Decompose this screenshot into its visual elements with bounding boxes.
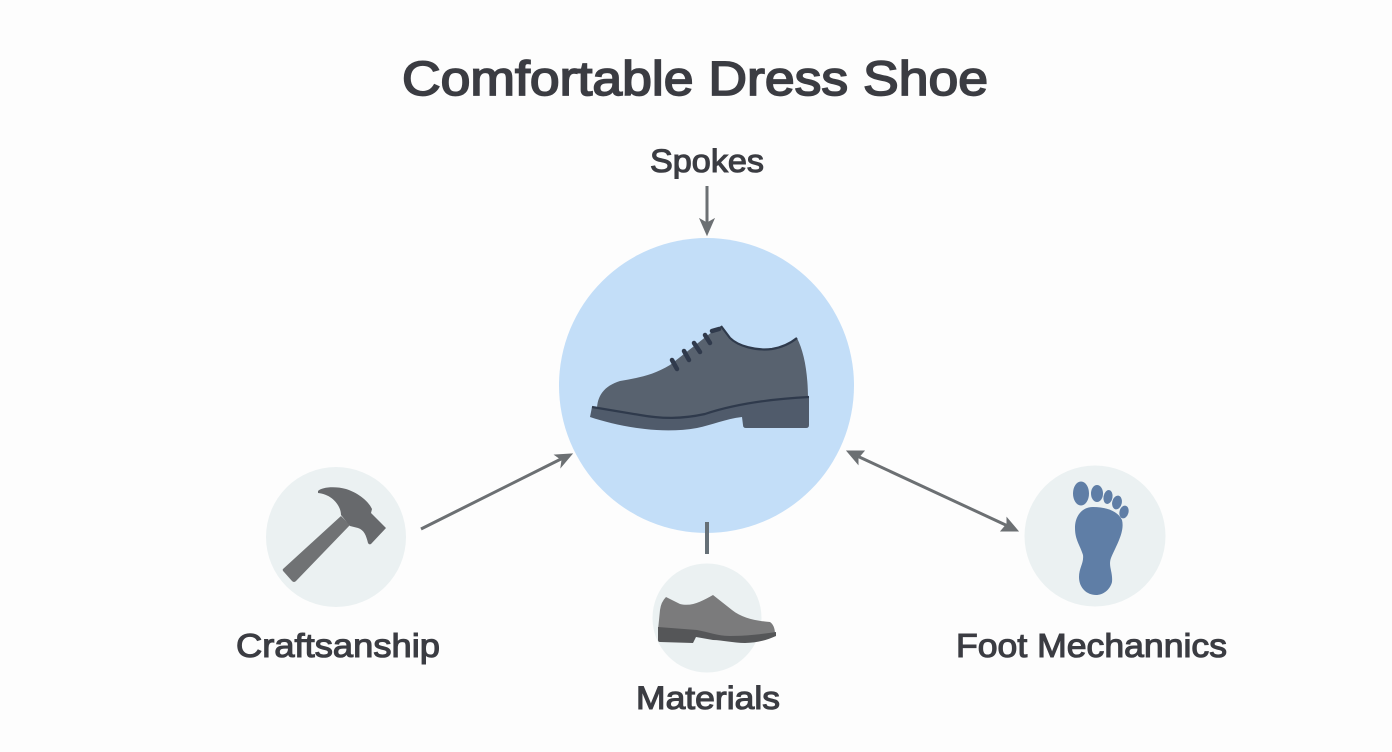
hub circle with shoe — [559, 238, 854, 533]
label: Materials: Materials — [636, 680, 780, 716]
icon: dress shoe — [590, 326, 809, 430]
connector: Materials to hub — [705, 522, 709, 554]
arrow: Spokes to hub — [700, 186, 714, 235]
node: Materials — [636, 564, 780, 716]
label: Spokes: Spokes — [650, 143, 764, 179]
node: Foot Mechanics — [956, 466, 1227, 664]
laces — [672, 329, 719, 369]
arrow: Foot Mechanics and hub, two-way — [847, 451, 1018, 531]
arrow: Craftsmanship to hub — [421, 454, 572, 529]
icon: hammer — [283, 487, 386, 582]
node: Craftsmanship — [236, 467, 440, 664]
label: Craftsanship: Craftsanship — [236, 627, 440, 664]
icon: footprint — [1073, 482, 1130, 595]
icon: grey shoe — [658, 595, 776, 643]
label: Foot Mechannics: Foot Mechannics — [956, 627, 1227, 664]
title: Comfortable Dress Shoe — [402, 53, 988, 106]
